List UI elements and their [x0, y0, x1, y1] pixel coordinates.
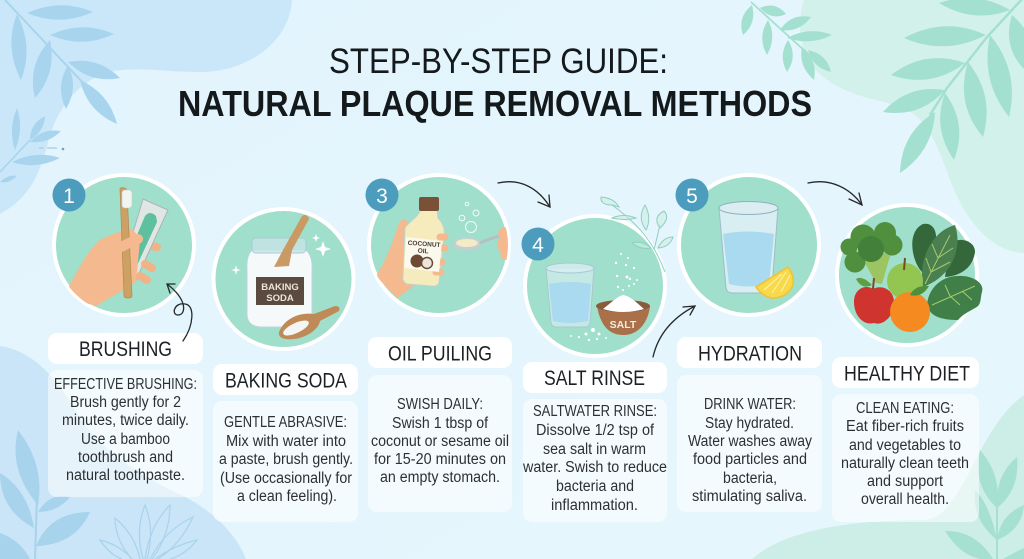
text: oil pulling: an empty stomach. [380, 469, 500, 486]
text: healthy diet: and vegetables to [849, 437, 961, 454]
text: baking soda: Mix with water into [226, 433, 346, 450]
number badge 1: 1 [63, 185, 75, 208]
icon: baking soda jar: SODA [266, 293, 294, 304]
number badge 4: 4 [532, 234, 544, 257]
text: brushing: natural toothpaste. [66, 467, 185, 484]
step 2: baking soda [213, 209, 358, 522]
label: healthy diet [832, 357, 979, 388]
text: hydration: bacteria, [723, 470, 777, 487]
text: salt rinse: Dissolve 1/2 tsp of [536, 422, 655, 439]
text: healthy diet: Eat fiber-rich fruits [846, 418, 964, 435]
text: salt rinse: bacteria and [556, 478, 634, 495]
leaves: top left branch [0, 0, 120, 182]
text: healthy diet: naturally clean teeth [841, 455, 969, 472]
text: brushing: Use a bamboo [81, 431, 170, 448]
arrow: step 3 to step 4 [498, 182, 550, 207]
text: baking soda: GENTLE ABRASIVE: [224, 414, 347, 431]
text: hydration: food particles and [693, 451, 807, 468]
label: oil pulling: OIL PUILING [388, 342, 492, 366]
text: oil pulling: for 15-20 minutes on [374, 451, 506, 468]
text: salt rinse: SALTWATER RINSE: [533, 403, 657, 420]
arrow: step 5 to step 6 [808, 182, 862, 205]
icon: vegetables and fruit [837, 205, 982, 345]
text: salt rinse: inflammation. [551, 497, 638, 514]
text: oil pulling: coconut or sesame oil [371, 433, 509, 450]
step 6: healthy diet [832, 205, 982, 522]
text: baking soda [213, 401, 358, 522]
label: salt rinse: SALT RINSE [544, 366, 645, 390]
text: salt rinse [522, 399, 667, 522]
text: oil pulling [368, 375, 512, 512]
text: baking soda: a paste, brush gently. [219, 451, 353, 468]
icon: glass of water with lemon [679, 175, 819, 315]
leaves: top right large branch [883, 0, 1024, 173]
label: brushing: BRUSHING [79, 337, 172, 361]
text: oil pulling: Swish 1 tbsp of [392, 415, 489, 432]
text: brushing: minutes, twice daily. [62, 412, 189, 429]
title: STEP-BY-STEP GUIDE: [329, 42, 668, 81]
text: hydration: DRINK WATER: [704, 396, 796, 413]
leaves: top right small branch [741, 2, 832, 80]
label: brushing [48, 333, 203, 364]
number badge 3 [366, 178, 398, 212]
icon: glass of water and salt bowl [525, 216, 665, 356]
label: hydration [677, 337, 822, 368]
label: baking soda [213, 364, 358, 395]
leaves: bottom right branch [945, 450, 1024, 559]
number badge 1 [52, 178, 86, 212]
label: salt rinse [523, 362, 667, 393]
text: hydration: stimulating saliva. [692, 488, 807, 505]
number badge 5: 5 [686, 185, 698, 208]
title [178, 42, 812, 124]
number badge 4 [522, 228, 554, 260]
text: healthy diet: overall health. [861, 491, 949, 508]
text: brushing: Brush gently for 2 [70, 394, 181, 411]
text: brushing: toothbrush and [78, 449, 173, 466]
step 5: hydration [676, 175, 822, 512]
arrow: looped arrow to step 1 [167, 284, 192, 341]
text: healthy diet [832, 394, 979, 522]
icon: coconut oil bottle and spoon: COCONUT [407, 240, 441, 249]
step 3: oil pulling [366, 175, 512, 512]
text: salt rinse: water. Swish to reduce [522, 459, 667, 476]
step 4: salt rinse [522, 197, 673, 522]
label: healthy diet: HEALTHY DIET [844, 362, 970, 386]
number badge 3: 3 [376, 185, 388, 208]
text: hydration: Water washes away [688, 433, 812, 450]
icon: decorative sprig [601, 197, 673, 272]
text: oil pulling: SWISH DAILY: [397, 396, 483, 413]
icon: glass of water and salt bowl: SALT [610, 319, 637, 331]
title: NATURAL PLAQUE REMOVAL METHODS [178, 83, 812, 124]
text: hydration: Stay hydrated. [705, 415, 794, 432]
text: baking soda: a clean feeling). [237, 488, 337, 505]
text: salt rinse: sea salt in warm [543, 441, 646, 458]
leaves: bottom centre plant outline [100, 505, 197, 559]
leaves: bottom left branch [0, 430, 90, 559]
text: baking soda: (Use occasionally for [220, 470, 352, 487]
step 1: brushing [48, 175, 203, 497]
text: healthy diet: CLEAN EATING: [856, 400, 954, 417]
number badge 5 [676, 178, 708, 212]
label: oil pulling [368, 337, 512, 368]
icon: baking soda jar: BAKING [261, 282, 299, 293]
icon: coconut oil bottle and spoon: OIL [417, 248, 429, 255]
text: brushing: EFFECTIVE BRUSHING: [54, 376, 197, 393]
arrow: step 4 to step 5 [653, 306, 695, 357]
icon: baking soda jar [214, 209, 354, 349]
label: baking soda: BAKING SODA [225, 368, 348, 392]
text: hydration [677, 375, 822, 512]
label: hydration: HYDRATION [698, 342, 802, 366]
icon: coconut oil bottle and spoon [369, 175, 510, 315]
text: brushing [48, 370, 203, 497]
text: healthy diet: and support [867, 473, 944, 490]
icon: toothbrush, toothpaste and hand [54, 175, 194, 315]
